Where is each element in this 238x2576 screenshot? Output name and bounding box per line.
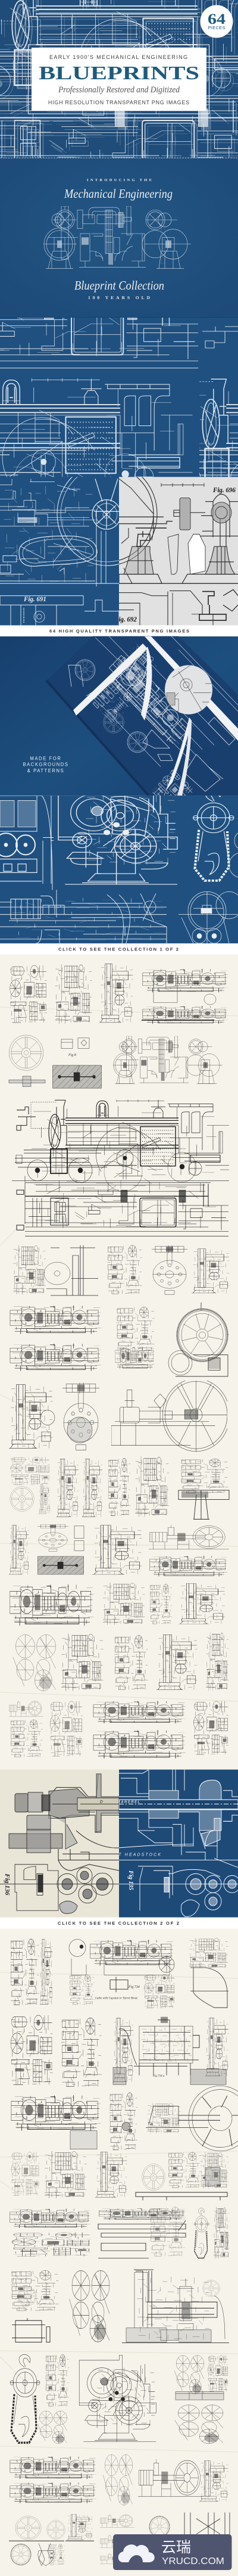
drawing: turret lathe: Lathe with Capstan or Turret Head. bbox=[95, 1997, 138, 2000]
drawing: flywheel bbox=[178, 2086, 238, 2151]
subtitle line: EARLY 1900'S MECHANICAL ENGINEERING bbox=[49, 54, 187, 60]
age line: 100 YEARS OLD bbox=[88, 295, 151, 300]
drawing sheet: row 4 bbox=[13, 1245, 230, 1295]
brand url: YRUCD.COM bbox=[162, 2556, 224, 2566]
drawing sheet: row 2 bbox=[9, 1035, 223, 1089]
mandrel label: MANDREL bbox=[117, 1800, 140, 1804]
rotated figure label: Fig 136 bbox=[4, 1873, 11, 1896]
drawing sheet: row 9 bbox=[10, 1583, 225, 1626]
drawing: side view crop bbox=[0, 378, 193, 477]
script subheading: Blueprint Collection bbox=[74, 278, 164, 293]
drawing: right gear machine bbox=[178, 891, 238, 943]
caption strip: collection 1 bbox=[0, 944, 238, 955]
drawing: locomotive blueprint background bbox=[0, 0, 238, 158]
ribbon bbox=[73, 636, 238, 796]
drawing sheet: row 6 bbox=[11, 2270, 229, 2343]
drawing sheet: row 2 bbox=[11, 2015, 228, 2087]
drawing sheet: row 7 bbox=[10, 2354, 228, 2444]
drawing sheet: row 10 bbox=[13, 1632, 228, 1691]
drawing sheet: row 9 bbox=[9, 2512, 230, 2566]
drawing sheet: row 1 bbox=[10, 1938, 228, 2008]
panel: blueprint pattern tile bbox=[0, 317, 238, 477]
panel: hero blueprint header bbox=[0, 0, 238, 158]
drawing: top right parts bbox=[202, 327, 238, 348]
title frame bbox=[29, 45, 209, 114]
lathe sections: Cross Section bbox=[153, 974, 166, 977]
headstock label: FAST HEADSTOCK bbox=[107, 1852, 161, 1857]
badge: 64 pieces: 64 bbox=[208, 11, 226, 27]
drawing sheet: row 8 bbox=[10, 2454, 228, 2505]
drawing sheet: row 2: Fig 734 a bbox=[152, 2074, 165, 2078]
drawing: firebox section bbox=[0, 796, 54, 890]
badge: 64 pieces bbox=[200, 5, 233, 38]
badge: 64 pieces: PIECES bbox=[208, 25, 225, 30]
drawing sheet: row 11 bbox=[9, 1701, 228, 1758]
caption strip: 64 images: 64 HIGH QUALITY TRANSPARENT PNG IMAGES bbox=[49, 628, 189, 634]
panel: cream collection 1 bbox=[0, 955, 238, 1770]
drawing sheet: row 6 bbox=[9, 1379, 230, 1452]
drawing sheet: row 2: Fig 8 bbox=[68, 1054, 76, 1057]
lathe sections bbox=[142, 969, 228, 1024]
figure label: Fig. 696 bbox=[212, 487, 236, 494]
drawing sheet: row 5: Connecting Rod bbox=[110, 2215, 126, 2217]
panel: headstock comparison bbox=[0, 1770, 238, 1918]
gift tag bbox=[164, 665, 214, 714]
drawing sheet: row 4 bbox=[11, 2151, 228, 2201]
side label: BACKGROUNDS bbox=[23, 762, 69, 767]
side label: MADE FOR bbox=[30, 756, 61, 761]
drawing: locomotive bbox=[12, 1099, 229, 1236]
side label bbox=[23, 756, 69, 773]
drawing sheet: row 7 bbox=[10, 1456, 229, 1520]
drawing: radial drill bbox=[122, 2270, 229, 2343]
intro heading: INTRODUCING THE bbox=[87, 178, 152, 182]
drawing sheet: row 8 bbox=[9, 1524, 229, 1577]
package bbox=[45, 636, 238, 796]
right transparent half bbox=[119, 477, 238, 626]
panel: blueprint versus transparent comparison bbox=[0, 462, 238, 625]
drawing sheet: row 1 bbox=[10, 964, 228, 1024]
caption strip: collection 2 bbox=[0, 1918, 238, 1928]
drawing sheet: row 5 bbox=[10, 1303, 228, 1376]
cream headstock half bbox=[0, 1770, 119, 1918]
panel: cream collection 2 bbox=[0, 1928, 238, 2576]
panel: wrapped gift mockup bbox=[0, 631, 238, 943]
drawing: plate shear bbox=[134, 2017, 199, 2075]
side label: & PATTERNS bbox=[27, 768, 64, 773]
rotated figure label: Fig 135 bbox=[127, 1870, 134, 1890]
drawing sheet: row 3 bbox=[11, 2086, 238, 2151]
caption strip: collection 2: CLICK TO SEE THE COLLECTION 2 OF 2 bbox=[58, 1921, 179, 1926]
script heading: Mechanical Engineering bbox=[64, 187, 173, 201]
drawing: three-view press bbox=[43, 206, 191, 269]
figure label: Fig. 691 bbox=[23, 596, 46, 603]
brand text: 云瑞 bbox=[161, 2539, 191, 2556]
drawing: plan view crop bbox=[0, 318, 199, 368]
drawing: turret lathe: Fig 734 bbox=[128, 1985, 140, 1989]
drawing: turret lathe bbox=[69, 1939, 175, 2008]
drawing: geared machine bbox=[58, 796, 178, 885]
drawing sheet: row 5 bbox=[10, 2207, 229, 2258]
watermark badge bbox=[113, 2534, 232, 2570]
format line: HIGH RESOLUTION TRANSPARENT PNG IMAGES bbox=[48, 100, 189, 105]
left blueprint half bbox=[0, 477, 119, 626]
panel: blueprint details bbox=[0, 779, 238, 943]
script tagline: Professionally Restored and Digitized bbox=[58, 85, 180, 95]
icon: cloud bbox=[118, 2544, 155, 2562]
drawing: chain block bbox=[193, 788, 234, 881]
drawing: right side crop bbox=[199, 379, 238, 477]
figure label: Fig. 692 bbox=[114, 616, 137, 623]
blueprint headstock half bbox=[107, 1770, 238, 1918]
panel: introduction bbox=[0, 158, 238, 317]
caption strip: 64 images bbox=[0, 626, 238, 636]
letter labels: D bbox=[100, 1800, 103, 1804]
caption strip: collection 1: CLICK TO SEE THE COLLECTION 1 OF 2 bbox=[58, 946, 178, 952]
drawing: engine and boiler bbox=[0, 890, 167, 943]
main title: BLUEPRINTS bbox=[39, 62, 199, 83]
